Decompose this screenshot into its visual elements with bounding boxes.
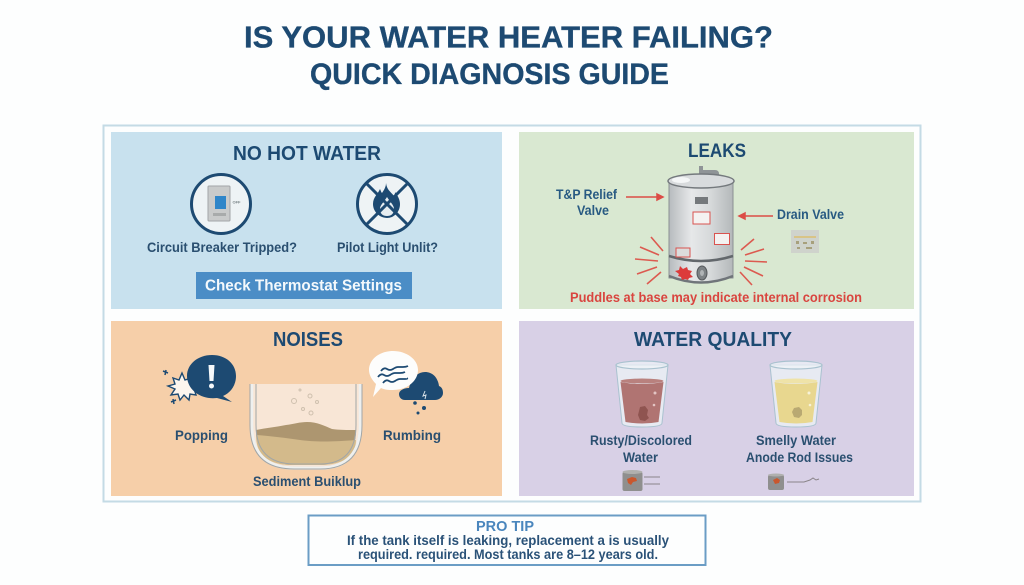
icon: water heater tank xyxy=(668,166,734,282)
label: sediment buildup: Sediment Buiklup xyxy=(253,474,361,489)
heading: leaks: LEAKS xyxy=(688,141,746,162)
panel: noises xyxy=(111,321,502,496)
title: QUICK DIAGNOSIS GUIDE xyxy=(310,58,669,91)
heading: noises: NOISES xyxy=(273,329,343,351)
button: check thermostat xyxy=(196,272,412,299)
label: rusty water xyxy=(590,433,692,465)
caption: puddles: Puddles at base may indicate internal corrosion xyxy=(570,290,862,305)
icon: rusty water glass xyxy=(616,361,668,427)
title: IS YOUR WATER HEATER FAILING? xyxy=(244,20,773,54)
label: rusty water: Water xyxy=(623,450,659,465)
label: smelly water: Anode Rod Issues xyxy=(746,450,853,465)
icon: smelly water glass xyxy=(770,361,822,427)
label: pilot light: Pilot Light Unlit? xyxy=(337,239,438,255)
label: circuit breaker: Circuit Breaker Tripped? xyxy=(147,239,297,255)
icon: leak alert rays xyxy=(635,237,767,285)
label: smelly water: Smelly Water xyxy=(756,433,837,448)
icon: pilot light out xyxy=(358,174,416,234)
outer frame xyxy=(104,126,920,502)
icon: popping bubble xyxy=(163,355,236,404)
text: pro tip body xyxy=(347,533,669,562)
label: smelly water xyxy=(746,433,853,465)
label: rusty water: Rusty/Discolored xyxy=(590,433,692,448)
icon: sediment tank xyxy=(250,384,362,469)
heading: water quality: WATER QUALITY xyxy=(634,329,793,351)
heading: pro tip: PRO TIP xyxy=(476,518,534,535)
text: pro tip body: If the tank itself is leaking, replacement a is usually xyxy=(347,533,669,548)
panel: water quality xyxy=(519,321,914,496)
icon: circuit breaker: OFF xyxy=(232,200,241,204)
icon: rumbling bubble and cloud xyxy=(369,351,443,414)
panel: leaks xyxy=(519,132,914,309)
label: T&P relief valve: Valve xyxy=(577,203,609,218)
icon: corroded anode 2 xyxy=(768,474,819,490)
title xyxy=(244,20,773,91)
label: popping: Popping xyxy=(175,427,228,443)
icon: circuit breaker xyxy=(192,174,250,234)
icon: drain valve panel xyxy=(791,230,819,253)
callout: pro tip xyxy=(308,516,706,565)
button: check thermostat: Check Thermostat Settings xyxy=(205,278,402,294)
label: drain valve: Drain Valve xyxy=(777,207,844,222)
panel: no hot water xyxy=(111,132,502,309)
icon: corroded anode 1 xyxy=(622,470,660,491)
arrow: T&P relief valve xyxy=(626,194,663,200)
arrow: drain valve xyxy=(739,213,773,219)
text: pro tip body: required. required. Most tanks are 8–12 years old. xyxy=(358,547,658,562)
label: T&P relief valve: T&P Relief xyxy=(556,187,617,202)
heading: no hot water: NO HOT WATER xyxy=(233,143,382,165)
label: rumbling: Rumbing xyxy=(383,427,441,443)
label: T&P relief valve xyxy=(556,187,617,218)
